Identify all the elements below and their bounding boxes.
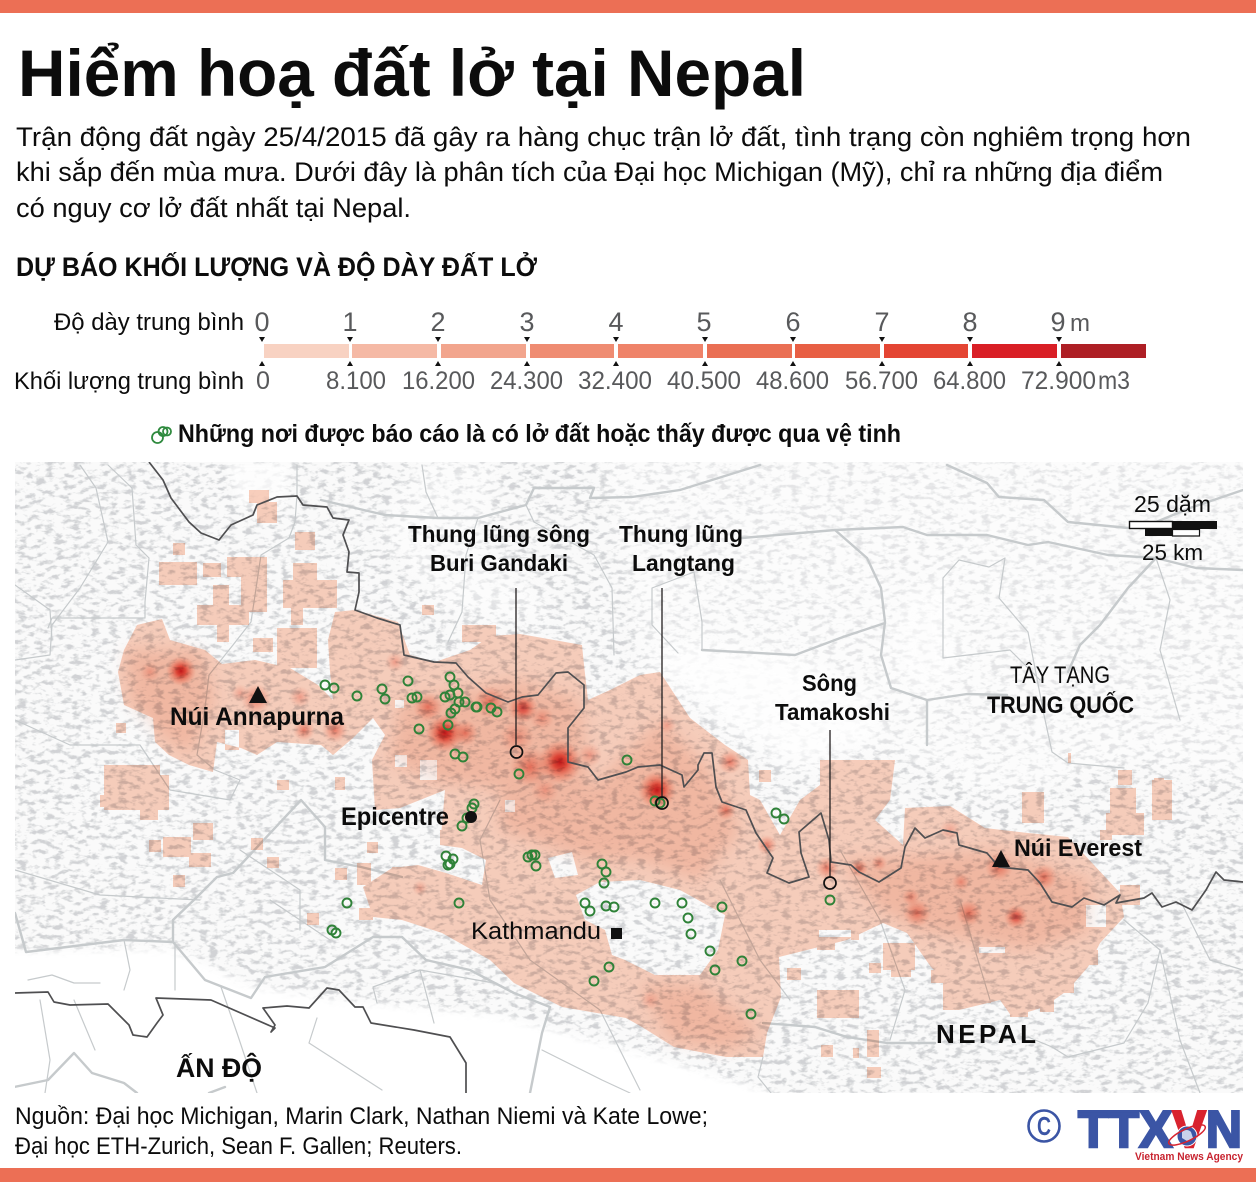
colour ramp bar	[264, 344, 1146, 358]
volume numbers: 72.900	[1021, 367, 1096, 395]
volume numbers: 32.400	[578, 367, 652, 395]
map panel	[0, 440, 1256, 1120]
source note	[15, 1103, 708, 1160]
marker: Everest: Núi Everest	[1014, 835, 1142, 862]
marker: Annapurna: Núi Annapurna	[170, 703, 345, 731]
legend text: Những nơi được báo cáo là có lở đất hoặc thấy được qua vệ tinh	[178, 420, 901, 448]
thickness numbers: 8	[962, 307, 978, 337]
rivers and roads	[14, 465, 1243, 1093]
copyright mark	[1028, 1110, 1060, 1142]
callout: Tamakoshi river: Sông	[802, 670, 857, 696]
callout: Langtang valley: Langtang	[632, 550, 735, 576]
volume numbers: 8.100	[326, 367, 386, 395]
logo: TTXVN	[1028, 1101, 1244, 1163]
reported landslide sites	[320, 672, 834, 1018]
landslide hot spots	[140, 652, 1057, 1010]
globe emblem	[1166, 1121, 1208, 1149]
volume numbers: 56.700	[845, 367, 918, 395]
intro text: có nguy cơ lở đất nhất tại Nepal.	[16, 193, 411, 223]
callout: Buri Gandaki valley: Thung lũng sông	[408, 521, 590, 547]
intro text: khi sắp đến mùa mưa. Dưới đây là phân tích của Đại học Michigan (Mỹ), chỉ ra những địa điểm	[16, 156, 1163, 187]
marker: Annapurna	[170, 686, 345, 731]
legend row label: volume: Khối lượng trung bình	[14, 368, 244, 395]
marker: Kathmandu: Kathmandu	[471, 918, 601, 945]
callout: Tamakoshi river	[775, 670, 890, 889]
marker: Everest	[992, 838, 1142, 867]
thickness numbers: 1	[342, 307, 358, 337]
scale bar	[1128, 494, 1217, 560]
scale bar: 25 dặm	[1134, 491, 1211, 517]
thickness numbers: 3	[519, 307, 535, 337]
volume numbers	[256, 367, 1130, 395]
marker: Kathmandu	[473, 922, 622, 939]
region label: Tibet, China: TÂY TẠNG	[1010, 662, 1110, 689]
callout: Tamakoshi river: Tamakoshi	[775, 699, 890, 725]
thickness numbers: 4	[608, 307, 624, 337]
volume numbers: 64.800	[933, 367, 1006, 395]
thickness numbers: 7	[874, 307, 890, 337]
callout: Langtang valley: Thung lũng	[619, 521, 743, 547]
copyright mark: C	[1037, 1111, 1051, 1141]
wordmark: TTXVN	[1078, 1101, 1242, 1159]
scale bar: 25 km	[1142, 540, 1203, 565]
callout: Buri Gandaki valley: Buri Gandaki	[430, 550, 568, 576]
thickness numbers: 2	[430, 307, 446, 337]
thickness numbers: 5	[696, 307, 712, 337]
section heading: DỰ BÁO KHỐI LƯỢNG VÀ ĐỘ DÀY ĐẤT LỞ	[16, 250, 537, 282]
icon: green overlapping rings	[152, 427, 171, 443]
thickness numbers: 9	[1050, 307, 1066, 337]
top orange bar	[0, 0, 1256, 13]
legend: thickness and volume scale	[14, 307, 1146, 395]
thickness numbers	[254, 307, 1090, 337]
agency name: Vietnam News Agency	[1135, 1151, 1244, 1163]
volume numbers: 0	[256, 367, 270, 395]
legend row label: thickness: Độ dày trung bình	[54, 309, 244, 336]
region label: Tibet, China	[987, 662, 1134, 719]
region label: Tibet, China: TRUNG QUỐC	[987, 691, 1134, 719]
Nepal–China border	[149, 462, 1243, 910]
intro text: Trận động đất ngày 25/4/2015 đã gây ra hàng chục trận lở đất, tình trạng còn nghiêm trọng hơn	[16, 122, 1191, 152]
region label: India: ẤN ĐỘ	[176, 1052, 262, 1083]
volume numbers: 40.500	[667, 367, 741, 395]
tick markers	[259, 337, 1062, 366]
thicker landslide patches	[125, 650, 1090, 1050]
thickness numbers: 6	[785, 307, 801, 337]
international borders	[15, 462, 1243, 1093]
region label: Nepal: NEPAL	[936, 1019, 1036, 1049]
marker: Epicentre: Epicentre	[341, 803, 449, 831]
volume numbers: 16.200	[402, 367, 475, 395]
landslide volume footprint	[100, 490, 1172, 1078]
title: Hiểm hoạ đất lở tại Nepal	[18, 36, 806, 110]
callout: Buri Gandaki valley	[408, 521, 590, 758]
source note: Đại học ETH-Zurich, Sean F. Gallen; Reuters.	[15, 1133, 462, 1160]
marker: Epicentre	[342, 807, 477, 830]
volume numbers: m3	[1098, 367, 1130, 395]
volume numbers: 24.300	[490, 367, 563, 395]
terrain relief texture	[0, 440, 1256, 1120]
volume numbers: 48.600	[756, 367, 829, 395]
source note: Nguồn: Đại học Michigan, Marin Clark, Nathan Niemi và Kate Lowe;	[15, 1103, 708, 1130]
thickness numbers: m	[1070, 310, 1090, 337]
intro text	[16, 122, 1191, 223]
callout: Langtang valley	[619, 521, 743, 809]
Nepal–India border	[15, 988, 466, 1093]
legend: reported landslide sites	[152, 420, 901, 448]
bottom orange bar	[0, 1168, 1256, 1182]
thickness numbers: 0	[254, 307, 270, 337]
